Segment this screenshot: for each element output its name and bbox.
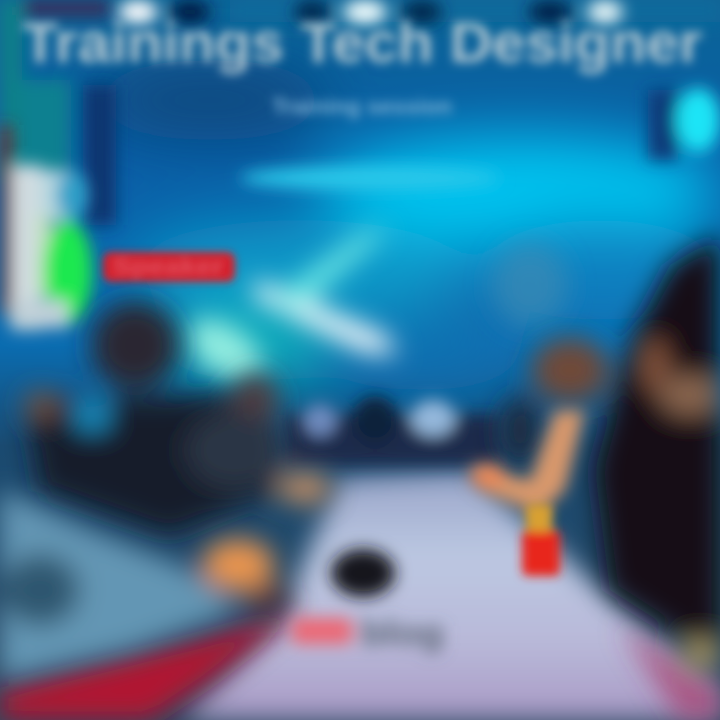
foreground person in denim — [0, 490, 290, 680]
light beams on screen — [177, 228, 568, 394]
red label — [103, 252, 235, 282]
audience: left group — [0, 301, 331, 680]
red carpet edges — [0, 610, 720, 720]
stage row dark silhouettes — [285, 396, 500, 465]
floor logo: red and grey wordmark — [292, 612, 444, 653]
title: Trainings Tech Designer — [22, 11, 702, 75]
left banner panel with green glow — [0, 125, 92, 330]
red label: Speaker — [113, 254, 224, 279]
floor logo: red and grey wordmark: blog — [360, 612, 444, 653]
lights and dark bands at the top — [118, 0, 623, 24]
raised arm — [470, 410, 585, 515]
floor — [180, 470, 720, 720]
subtitle: Training session — [272, 94, 452, 119]
audience: right group — [470, 235, 720, 671]
floor logo: black circle — [331, 549, 395, 597]
red cup — [522, 504, 560, 576]
